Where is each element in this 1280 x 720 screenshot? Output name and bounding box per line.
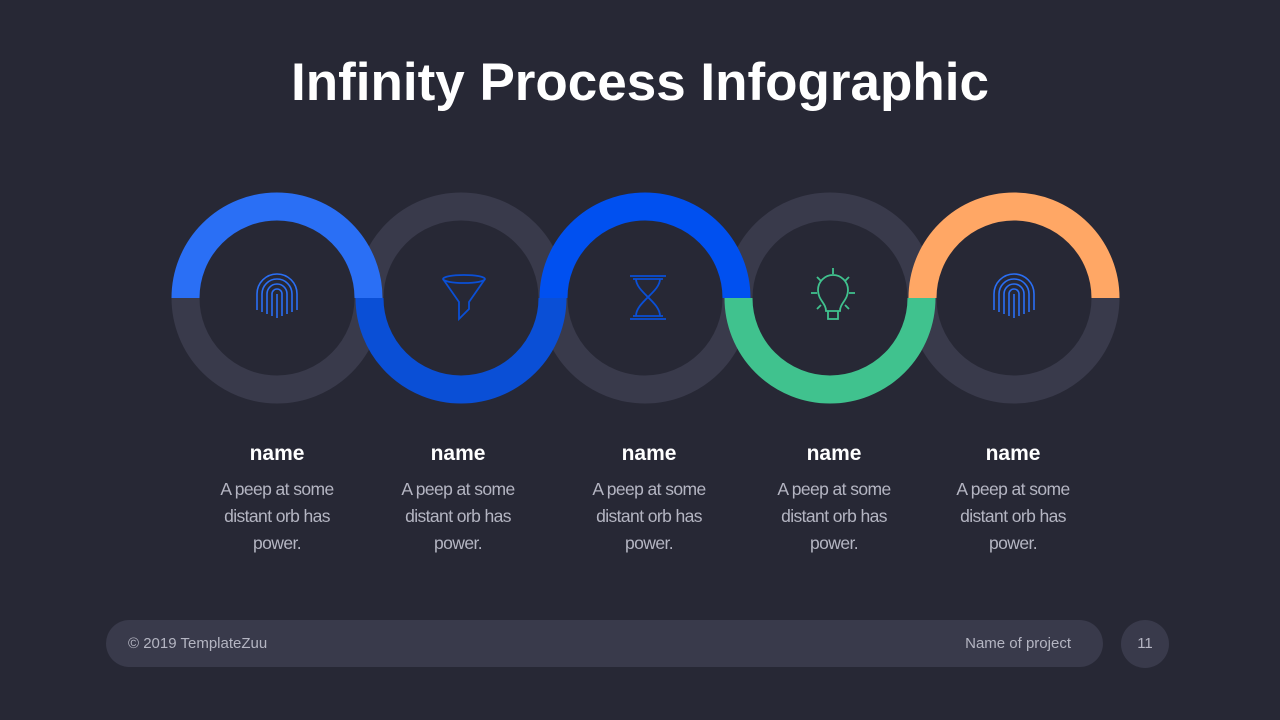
step 1 text: A peep at some distant orb has power. xyxy=(220,479,334,553)
step 2 text xyxy=(401,442,515,553)
ring 4 xyxy=(738,268,922,389)
step 3 text: A peep at some distant orb has power. xyxy=(592,479,706,553)
step 5 text: A peep at some distant orb has power. xyxy=(956,479,1070,553)
icon: funnel xyxy=(443,275,485,319)
page number xyxy=(1121,620,1169,668)
title: Infinity Process Infographic xyxy=(291,53,989,112)
icon: fingerprint xyxy=(994,274,1034,318)
step 5 text: name xyxy=(986,442,1040,465)
step 1 text: name xyxy=(250,442,304,465)
step 2 text: A peep at some distant orb has power. xyxy=(401,479,515,553)
step 4 text: name xyxy=(807,442,861,465)
ring 1 xyxy=(186,206,368,318)
step 3 text xyxy=(592,442,706,553)
icon: light bulb xyxy=(811,268,855,319)
step 4 text: A peep at some distant orb has power. xyxy=(777,479,891,553)
footer bar: Name of project xyxy=(965,635,1071,652)
icon: fingerprint xyxy=(257,274,297,318)
icon: hourglass xyxy=(630,276,666,319)
ring 2 xyxy=(370,275,552,389)
step 4 text xyxy=(777,442,891,553)
ring 3 xyxy=(554,206,736,319)
step 3 text: name xyxy=(622,442,676,465)
footer bar: © 2019 TemplateZuu xyxy=(128,635,267,652)
step 5 text xyxy=(956,442,1070,553)
step 1 text xyxy=(220,442,334,553)
page number: 11 xyxy=(1137,635,1153,652)
ring 5 xyxy=(922,206,1106,318)
footer bar xyxy=(106,620,1103,667)
step 2 text: name xyxy=(431,442,485,465)
